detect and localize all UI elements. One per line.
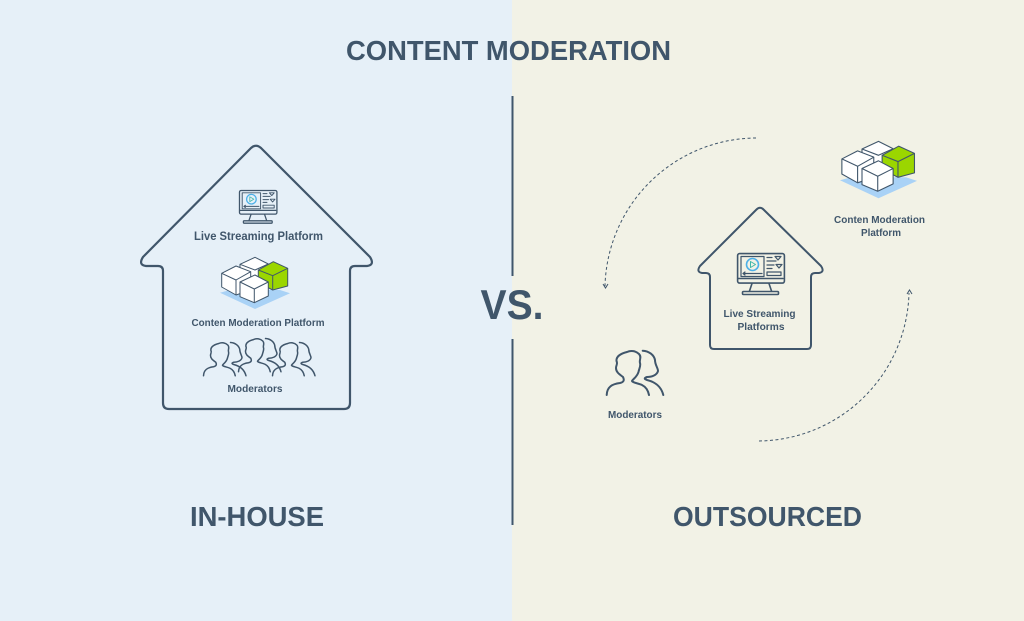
icon: group of moderators (204, 339, 315, 376)
left panel background: in-house (0, 0, 512, 621)
label: moderators: Moderators (228, 383, 283, 395)
panel: in-house (141, 146, 372, 409)
arrow: top-left cycle arc (603, 138, 756, 288)
arrow: bottom-right cycle arc (759, 290, 912, 441)
house outline: outsourced (698, 208, 823, 349)
icon: moderators (607, 351, 663, 395)
label: moderators: Moderators (608, 409, 662, 421)
label: content moderation platform: Conten Moderation (834, 214, 925, 226)
icon: live streaming monitor (738, 254, 784, 294)
label: content moderation platform: Conten Moderation Platform (192, 317, 324, 329)
icon: content moderation cubes (840, 141, 917, 198)
central divider (512, 96, 514, 525)
label: live streaming platforms: Live Streaming (724, 308, 796, 320)
heading: in-house: IN-HOUSE (190, 501, 324, 532)
label: live streaming platforms: Platforms (738, 321, 785, 333)
title: CONTENT MODERATION (346, 35, 671, 66)
house outline: in-house (141, 146, 372, 409)
label: content moderation platform: Platform (861, 227, 901, 239)
panel: outsourced (603, 138, 928, 441)
versus label: VS. (480, 281, 544, 328)
icon: content moderation cubes (220, 257, 290, 309)
heading: outsourced: OUTSOURCED (673, 501, 862, 532)
icon: live streaming monitor (239, 190, 277, 223)
right panel background: outsourced (512, 0, 1024, 621)
label: live streaming platform: Live Streaming Platform (194, 231, 323, 243)
